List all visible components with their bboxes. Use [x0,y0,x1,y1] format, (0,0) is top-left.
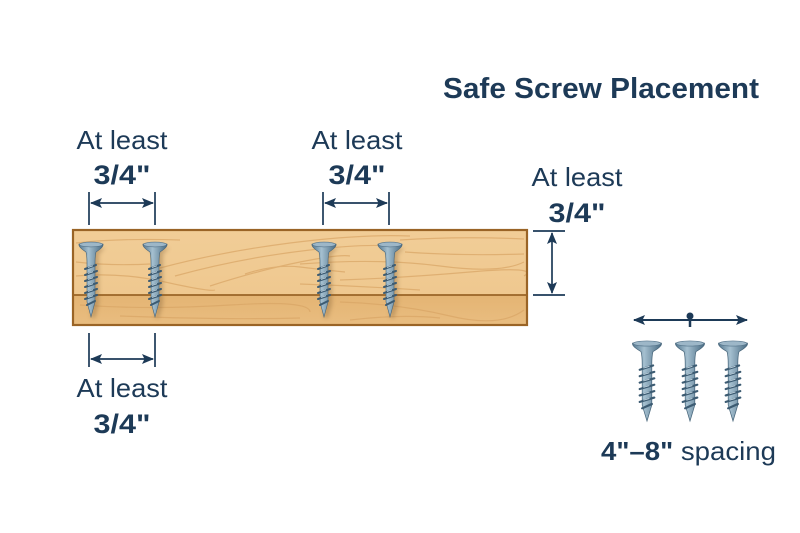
label: top left dimension: At least [76,125,168,155]
label: top centre dimension [312,125,403,190]
screw: spacing 2 [675,341,705,421]
label: bottom left dimension [76,373,168,439]
screw: board 2 [143,242,167,317]
title: Safe Screw Placement [443,73,759,105]
screw shadows [83,248,404,318]
label: right dimension: 3/4" [548,198,606,228]
label: top left dimension: 3/4" [94,160,150,190]
screw: board 4 [378,242,402,317]
label: top centre dimension: At least [312,125,403,155]
dimension arrow: top centre [323,192,389,225]
dimension arrow: bottom left [89,333,155,367]
label: right dimension: At least [532,162,623,192]
label: bottom left dimension: 3/4" [94,409,150,439]
label: right dimension [532,162,623,228]
label: top left dimension [76,125,168,190]
spacing arrow with centre marker [634,312,747,327]
dimension arrow: right edge [533,231,565,295]
label: bottom left dimension: At least [76,373,168,403]
label: top centre dimension: 3/4" [328,160,386,190]
wood board [73,230,527,325]
screw: board 3 [312,242,336,317]
dimension arrow: top left [89,192,155,225]
screw: board 1 [79,242,103,317]
spacing caption: 4"–8" spacing [601,436,776,466]
screw: spacing 1 [632,341,662,421]
screw: spacing 3 [718,341,748,421]
